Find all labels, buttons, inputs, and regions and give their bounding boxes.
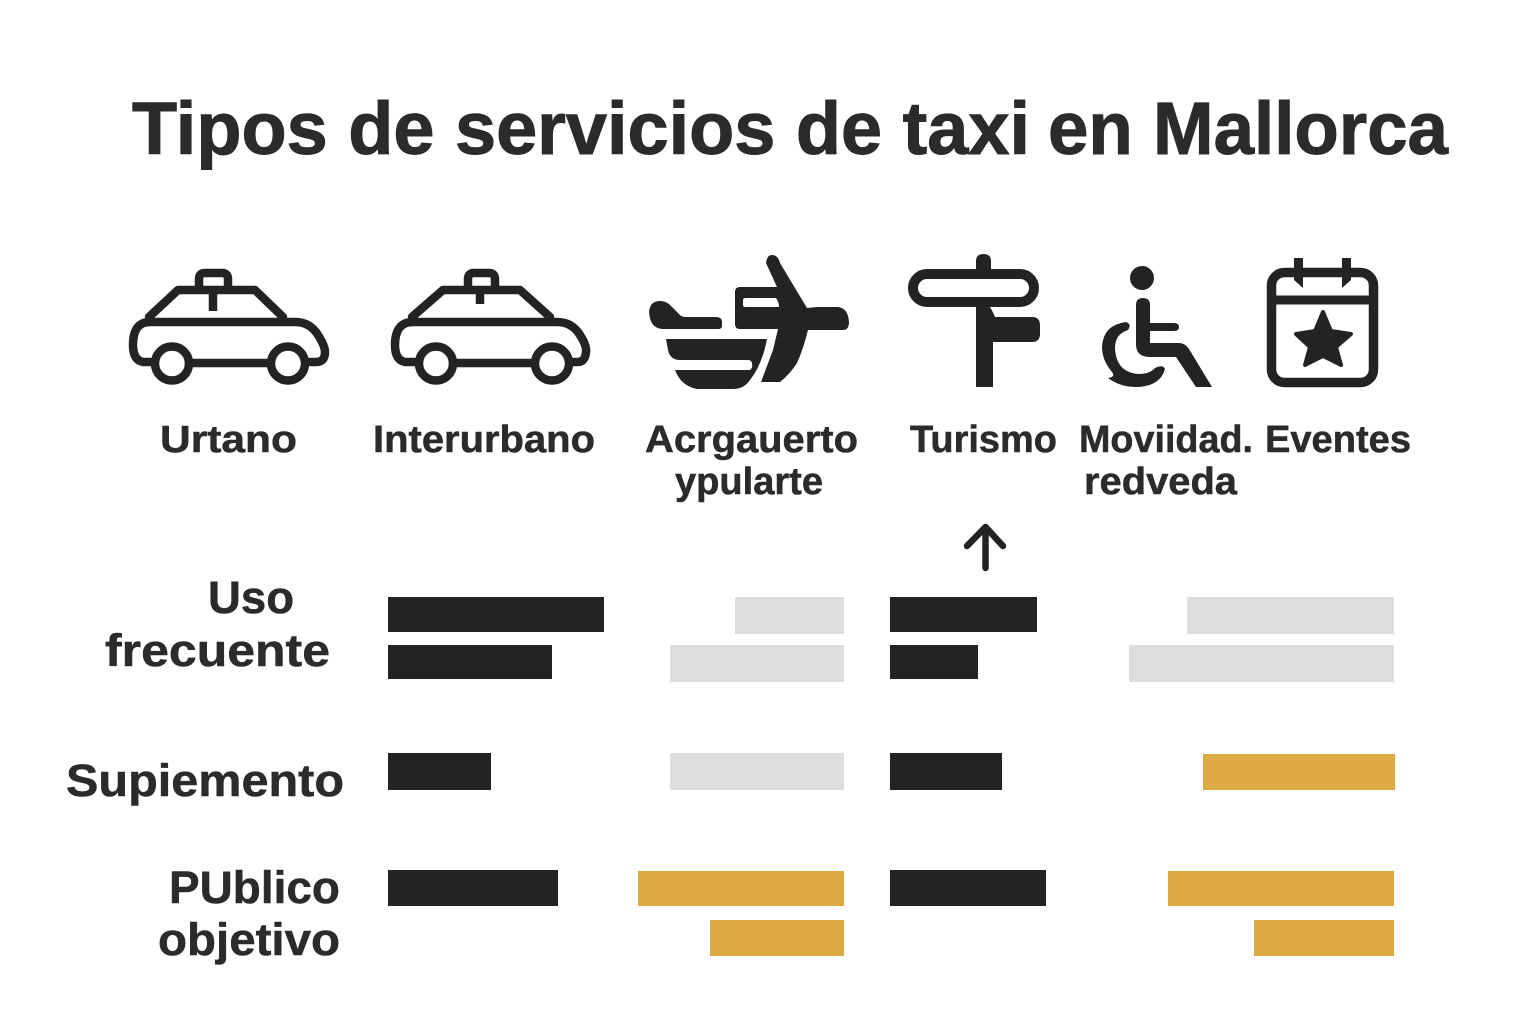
icon: airport and port xyxy=(649,255,849,389)
icon: interurban taxi xyxy=(395,273,586,380)
label: Urtano: Urtano xyxy=(160,419,297,461)
row label: Publico objetivo xyxy=(158,862,340,965)
row label: Publico objetivo: PUblico xyxy=(169,862,340,913)
label: Acrgauerto ypularte xyxy=(645,419,858,503)
icon: urban taxi xyxy=(133,273,325,380)
label: Moviidad. redveda: Moviidad. xyxy=(1079,419,1253,461)
row label: Publico objetivo: objetivo xyxy=(158,914,340,965)
row label: Uso frecuente: Uso xyxy=(208,572,294,623)
row label: Uso frecuente xyxy=(105,572,330,676)
arrow: up xyxy=(967,527,1003,568)
bars: suplemento xyxy=(388,753,1395,790)
label: Acrgauerto ypularte: ypularte xyxy=(675,461,823,503)
label: Moviidad. redveda: redveda xyxy=(1084,461,1238,503)
title xyxy=(132,87,1449,170)
icon: wheelchair xyxy=(1102,266,1212,387)
bars: publico objetivo xyxy=(388,870,1394,956)
row label: Supiemento: Supiemento xyxy=(66,755,344,806)
label: Eventes: Eventes xyxy=(1265,419,1411,461)
label: Interurbano: Interurbano xyxy=(373,419,595,461)
row label: Uso frecuente: frecuente xyxy=(105,625,330,676)
title: Tipos de servicios de taxi xyxy=(132,87,1030,170)
bars: uso frecuente xyxy=(388,597,1394,682)
icon: event calendar xyxy=(1271,258,1374,382)
label: Turismo: Turismo xyxy=(910,419,1057,461)
label: Moviidad. redveda xyxy=(1079,419,1253,503)
title: en Mallorca xyxy=(1048,87,1449,170)
icon: signpost xyxy=(913,254,1040,387)
label: Acrgauerto ypularte: Acrgauerto xyxy=(645,419,858,461)
